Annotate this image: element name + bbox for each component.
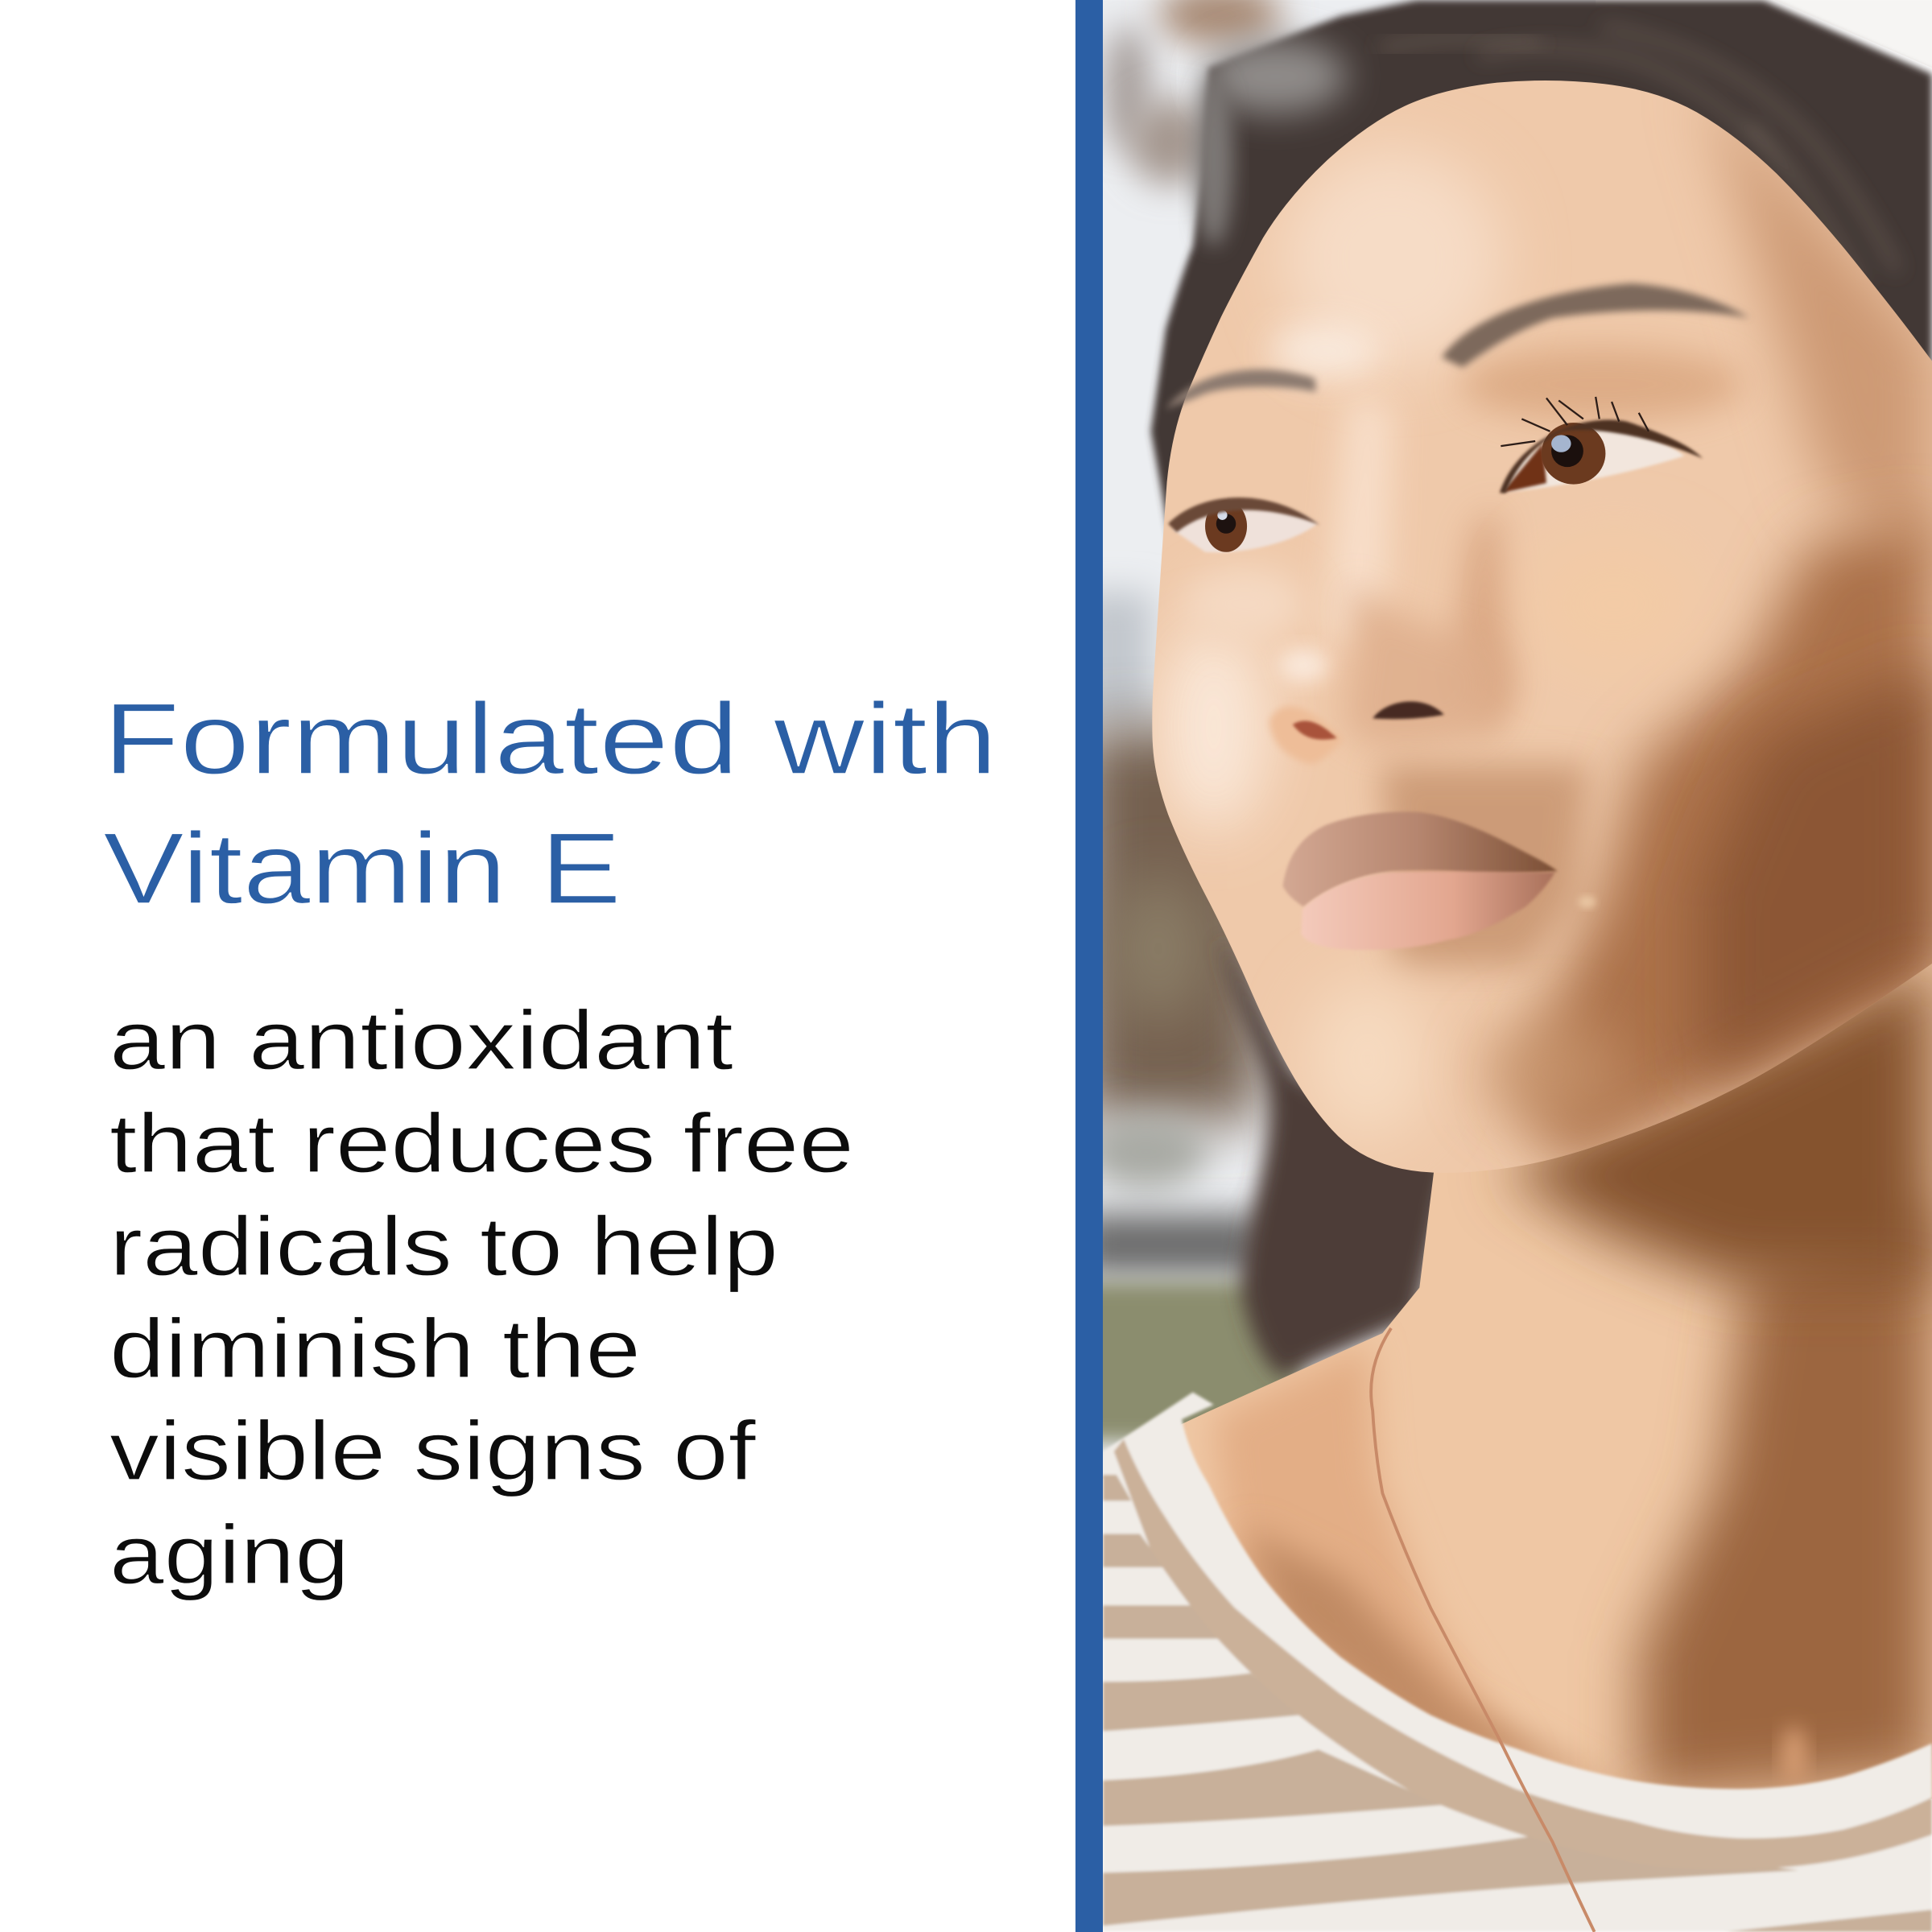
collar trim <box>1114 1439 1932 1870</box>
body text: aging <box>109 1509 349 1602</box>
heading <box>103 682 997 925</box>
body text: an antioxidant <box>109 994 733 1088</box>
forehead shade <box>1700 74 1932 567</box>
body text <box>109 994 854 1602</box>
brow ridge light <box>1269 324 1380 378</box>
right cheek light <box>1528 536 1700 671</box>
stripes <box>1103 1475 1932 1932</box>
neck shadow left <box>1206 1344 1498 1728</box>
nose side shade <box>1448 506 1516 739</box>
left cheek light <box>1158 622 1269 832</box>
body text: radicals to help <box>109 1200 778 1294</box>
blurred background <box>1078 0 1932 1479</box>
portrait photo <box>1103 0 1932 1932</box>
collarbone highlight <box>1781 1726 1806 1785</box>
heading: Formulated with <box>103 682 997 795</box>
body text: visible signs of <box>109 1405 757 1498</box>
forehead light <box>1282 148 1503 369</box>
lips <box>1282 811 1558 950</box>
upper lip shade <box>1380 764 1590 968</box>
neck shadow right <box>1639 1208 1932 1799</box>
nose bridge light <box>1324 394 1393 653</box>
blue divider bar <box>1075 0 1103 1932</box>
cheek shadow <box>1516 518 1932 1170</box>
heading: Vitamin E <box>103 811 621 925</box>
nose <box>1269 579 1501 764</box>
deep cheek shadow <box>1700 666 1932 1084</box>
necklace <box>1371 1328 1595 1932</box>
right socket shade <box>1460 348 1744 422</box>
neck and chest <box>1170 949 1932 1811</box>
chin light <box>1307 980 1430 1140</box>
left eye <box>1168 497 1319 552</box>
jaw shadow <box>1503 961 1932 1282</box>
shirt <box>1103 1393 1932 1932</box>
cheek glint <box>1579 896 1596 908</box>
left eyebrow <box>1166 369 1316 409</box>
jaw mid tone <box>1479 1017 1626 1127</box>
body text: that reduces free <box>109 1097 854 1191</box>
right eyebrow <box>1442 283 1749 367</box>
text panel <box>103 682 997 1602</box>
collar shadow <box>1243 1530 1601 1773</box>
right eye <box>1500 397 1703 493</box>
hair <box>1151 0 1932 1377</box>
face <box>1133 62 1932 1195</box>
body text: diminish the <box>109 1302 641 1396</box>
under eye light <box>1183 567 1307 641</box>
